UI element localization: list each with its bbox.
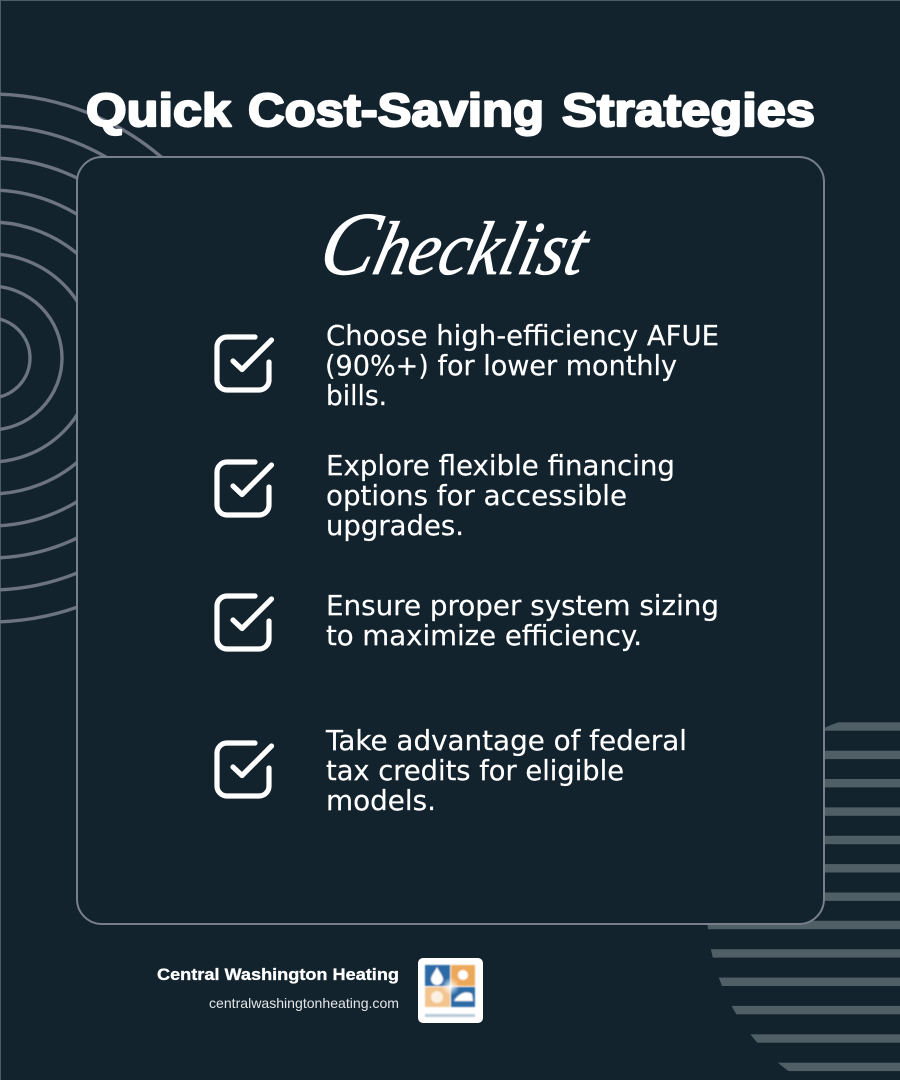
text: item 4: tax credits for eligible: [326, 754, 624, 787]
text: item 2: upgrades.: [326, 509, 464, 542]
text: item 4: models.: [326, 784, 436, 817]
text: item 2: Explore flexible financing: [326, 449, 675, 482]
text: item 2: [326, 449, 675, 542]
title: Quick: [86, 84, 231, 136]
checklist item 3: [217, 589, 719, 652]
decorative striped circle: [700, 722, 900, 1071]
footer website: centralwashingtonheating.com: [209, 995, 399, 1011]
text: item 2: options for accessible: [326, 479, 627, 512]
text: item 1: (90%+) for lower monthly: [325, 349, 677, 382]
text: item 1: Choose high-efficiency AFUE: [326, 319, 719, 352]
logo: [418, 958, 483, 1023]
footer brand name: Central Washington Heating: [157, 965, 399, 984]
icon: checkbox: [217, 743, 272, 796]
icon: checkbox: [217, 596, 272, 649]
text: item 3: [326, 589, 719, 652]
text: item 1: bills.: [326, 379, 387, 412]
title: Cost-Saving: [248, 84, 544, 136]
text: item 3: to maximize efficiency.: [326, 619, 642, 652]
checklist item 1: [217, 319, 719, 412]
text: item 4: Take advantage of federal: [325, 724, 687, 757]
text: item 1: [325, 319, 719, 412]
decorative concentric rings: [0, 94, 254, 622]
text: item 3: Ensure proper system sizing: [326, 589, 719, 622]
title: Strategies: [562, 84, 815, 136]
checklist item 4: [217, 724, 687, 817]
text: item 4: [325, 724, 687, 817]
heading: Checklist: Checklist: [311, 194, 601, 294]
panel: checklist: [77, 157, 824, 924]
icon: checkbox: [217, 337, 272, 390]
checklist item 2: [217, 449, 675, 542]
icon: checkbox: [217, 462, 272, 515]
title: [86, 84, 815, 136]
